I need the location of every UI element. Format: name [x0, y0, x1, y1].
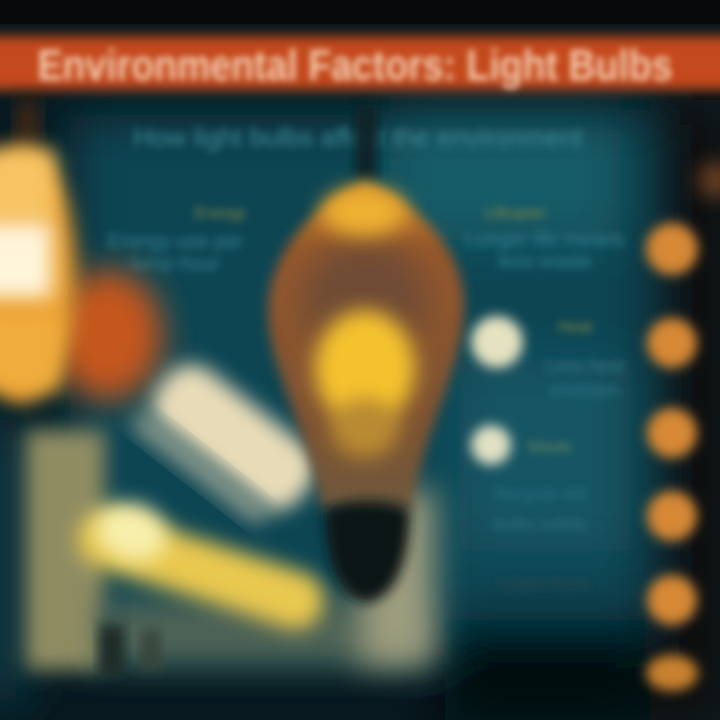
left text block: Energy use per [107, 231, 243, 253]
white tube lamp [128, 352, 328, 537]
top dark strip [0, 0, 720, 24]
right text block: Longer life means [466, 229, 624, 251]
beige lower-left panel [25, 430, 435, 675]
callout text: Less heat [546, 356, 624, 376]
orange lamp shade glow [53, 270, 163, 400]
callout text: emission [549, 380, 621, 400]
right text block: less waste [498, 251, 592, 273]
left text block: lamp hour [131, 253, 220, 275]
bulb interior shade [303, 240, 427, 360]
right text block: Lifespan [485, 205, 545, 222]
bulb top glow [322, 188, 406, 236]
right callout dots [471, 316, 523, 465]
callout text: Heat [558, 319, 592, 336]
subtitle text: How light bulbs affect the environment [133, 122, 584, 152]
callout text: Waste [528, 439, 572, 456]
left text block [107, 205, 245, 275]
left hanging lamp [0, 100, 76, 403]
right text block [466, 205, 624, 273]
cord [355, 105, 377, 180]
callout text: bulbs safely [492, 514, 588, 534]
title banner [0, 36, 720, 90]
central light bulb [268, 105, 464, 602]
bulb base [325, 501, 410, 602]
bulb glass [268, 182, 464, 510]
right column orange dots [646, 162, 720, 691]
callout text: Recycle old [493, 484, 587, 504]
left text block: Energy [195, 205, 245, 222]
callout text [492, 319, 624, 594]
callout text: Learn more [499, 574, 591, 594]
bulb inner glow [315, 310, 415, 426]
yellow glowing tube [71, 490, 335, 637]
